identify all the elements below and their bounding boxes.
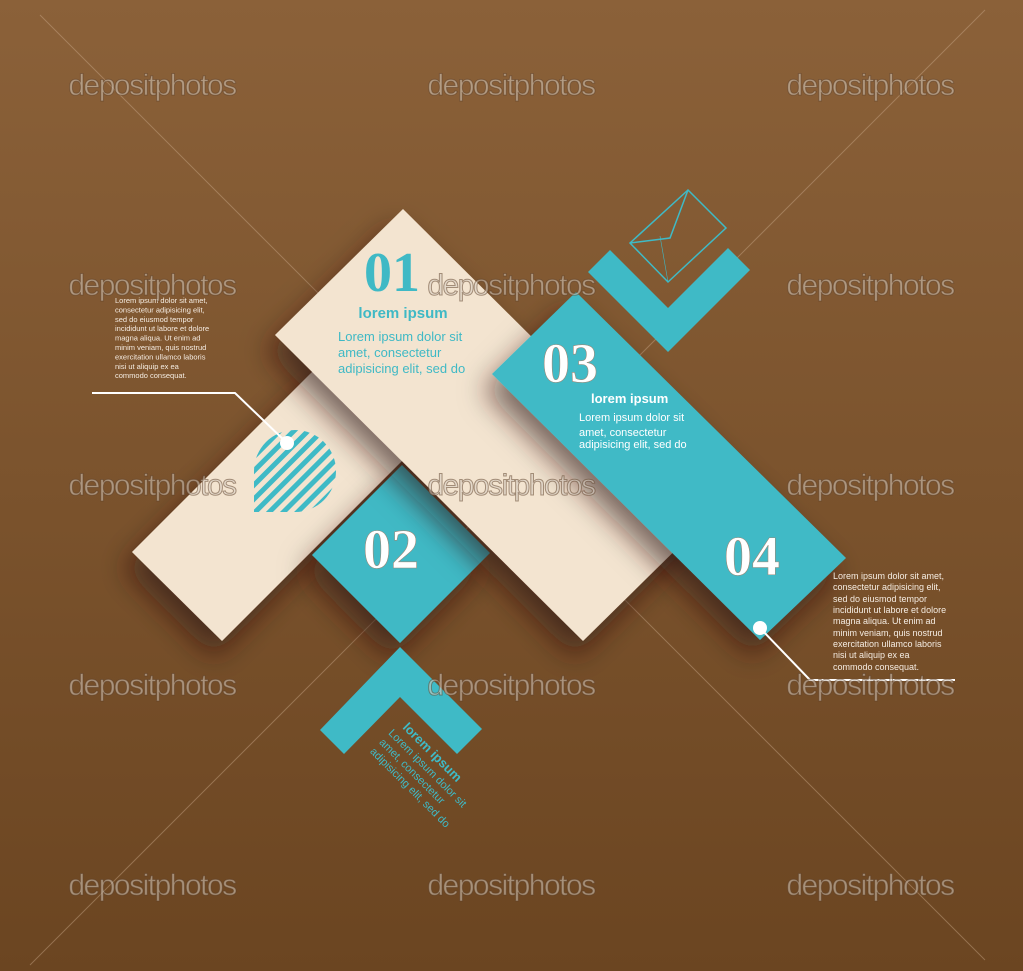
number 02: 02 — [363, 519, 419, 581]
text 03: adipisicing elit, sed do — [579, 439, 687, 451]
panel: teal chevron top — [588, 248, 750, 352]
text block left: Lorem ipsum dolor sit amet, — [115, 296, 208, 305]
text block left — [115, 296, 209, 380]
text block right: exercitation ullamco laboris — [833, 639, 942, 649]
number 03: 03 — [542, 333, 598, 395]
heading 03: lorem ipsum — [591, 391, 668, 406]
text block left: incididunt ut labore et dolore — [115, 324, 209, 333]
watermarks: depositphotos — [68, 269, 236, 302]
text block left: consectetur adipisicing elit, — [115, 305, 205, 314]
watermarks: depositphotos — [68, 869, 236, 902]
watermarks: depositphotos — [68, 469, 236, 502]
panel: cream band 02 — [132, 354, 420, 641]
text 01 — [338, 329, 465, 376]
watermarks: depositphotos — [786, 669, 954, 702]
text block left: nisi ut aliquip ex ea — [115, 362, 180, 371]
icon: envelope — [630, 190, 726, 282]
watermarks: depositphotos — [786, 269, 954, 302]
watermarks: depositphotos — [427, 669, 595, 702]
panel: teal 02 — [312, 465, 490, 643]
text block right: Lorem ipsum dolor sit amet, — [833, 571, 944, 581]
text: bottom rotated: Lorem ipsum dolor sit — [386, 727, 469, 810]
watermarks: depositphotos — [427, 269, 595, 302]
text block left: exercitation ullamco laboris — [115, 352, 206, 361]
text 03: Lorem ipsum dolor sit — [579, 412, 684, 424]
text block right: sed do eiusmod tempor — [833, 594, 927, 604]
text 01: Lorem ipsum dolor sit — [338, 329, 463, 344]
text 01: adipisicing elit, sed do — [338, 361, 465, 376]
number 04: 04 — [724, 526, 780, 588]
watermarks: depositphotos — [427, 869, 595, 902]
watermarks: depositphotos — [427, 69, 595, 102]
text block left: minim veniam, quis nostrud — [115, 343, 206, 352]
watermarks — [68, 69, 954, 902]
text 03 — [579, 412, 687, 451]
number 01: 01 — [364, 242, 420, 304]
text block left: magna aliqua. Ut enim ad — [115, 334, 200, 343]
watermarks: depositphotos — [786, 69, 954, 102]
text block left: sed do eiusmod tempor — [115, 315, 194, 324]
watermarks: depositphotos — [68, 669, 236, 702]
text: bottom rotated: adipisicing elit, sed do — [367, 746, 452, 830]
connector line left — [92, 393, 294, 450]
panel: cream band 01 — [275, 209, 711, 641]
heading 01: lorem ipsum — [358, 305, 448, 322]
panel: teal chevron bottom — [320, 647, 482, 754]
watermarks: depositphotos — [427, 469, 595, 502]
text block right: incididunt ut labore et dolore — [833, 605, 946, 615]
panel: teal band 03/04 — [492, 292, 846, 640]
icon: striped drop — [254, 430, 336, 512]
text block right: minim veniam, quis nostrud — [833, 628, 943, 638]
text 01: amet, consectetur — [338, 345, 442, 360]
text 03: amet, consectetur — [579, 427, 667, 439]
text block right: commodo consequat. — [833, 662, 919, 672]
text: bottom rotated — [367, 715, 482, 830]
text block right: nisi ut aliquip ex ea — [833, 650, 910, 660]
connector line right — [753, 621, 955, 680]
text block right: consectetur adipisicing elit, — [833, 582, 941, 592]
text: bottom rotated: amet, consectetur — [377, 736, 447, 807]
text block right — [833, 571, 946, 672]
watermarks: depositphotos — [68, 69, 236, 102]
watermarks: depositphotos — [786, 469, 954, 502]
text: bottom rotated: lorem ipsum — [400, 720, 465, 785]
text block left: commodo consequat. — [115, 371, 187, 380]
watermarks: depositphotos — [786, 869, 954, 902]
text block right: magna aliqua. Ut enim ad — [833, 616, 936, 626]
